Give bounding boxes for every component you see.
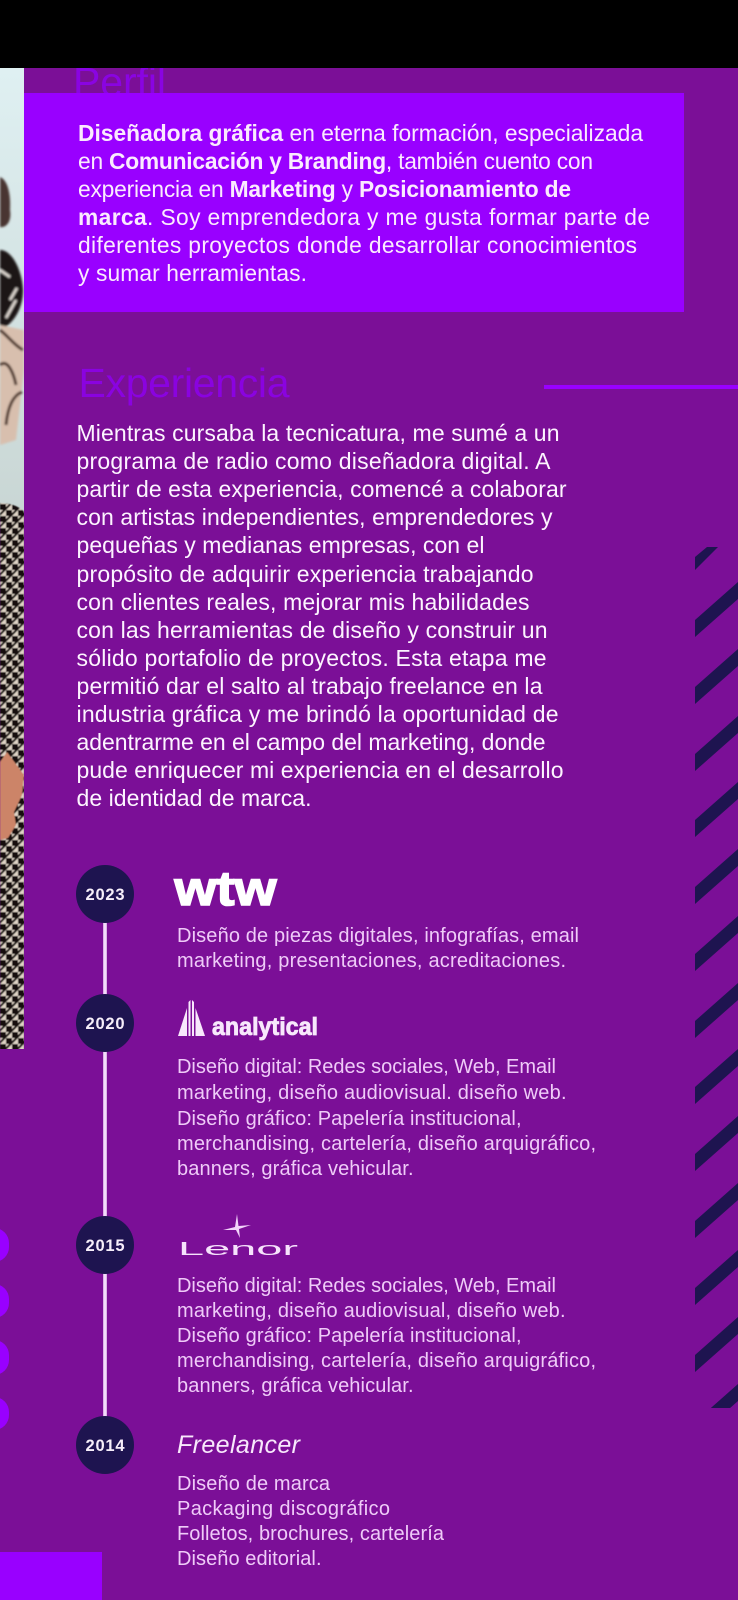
description 2014: Diseño de marca: [177, 1473, 331, 1495]
experience text block: propósito de adquirir experiencia trabajando: [76, 561, 534, 587]
timeline spine: [103, 894, 107, 1445]
logo: analytical: analytical: [212, 1013, 318, 1041]
experience text block: [76, 420, 567, 811]
heading rule: [544, 385, 738, 389]
logo: Lenor: [178, 1214, 298, 1259]
year badge 2020: [76, 994, 134, 1052]
icon: four-point star: [223, 1214, 251, 1238]
year badge 2015: [76, 1216, 134, 1274]
experience text block: de identidad de marca.: [76, 785, 312, 811]
bottom-left purple block: [0, 1552, 102, 1600]
logo: wtw: wtw: [173, 863, 277, 916]
description 2020: Diseño digital: Redes sociales, Web, Email: [177, 1056, 556, 1078]
timeline entry 2020: [76, 994, 596, 1180]
description 2014: Diseño editorial.: [177, 1548, 322, 1570]
logo: Lenor: Lenor: [178, 1239, 298, 1259]
description 2014: Packaging discográfico: [177, 1498, 390, 1520]
experience text block: pequeñas y medianas empresas, con el: [76, 532, 484, 558]
description 2015: Diseño digital: Redes sociales, Web, Email: [177, 1275, 556, 1297]
year badge 2014: 2014: [86, 1437, 125, 1455]
title: Freelancer: Freelancer: [177, 1431, 302, 1459]
timeline entry 2023: [76, 863, 579, 972]
panel background: [24, 93, 684, 312]
experience text block: pude enriquecer mi experiencia en el desarrollo: [76, 757, 564, 783]
year badge 2015: 2015: [86, 1237, 124, 1255]
decorative left purple dots: [0, 1228, 9, 1430]
profile text block: Diseñadora gráfica en eterna formación, especializada: [78, 120, 643, 146]
description 2023: marketing, presentaciones, acreditaciones.: [177, 950, 566, 972]
experience text block: con artistas independientes, emprendedores y: [76, 504, 553, 530]
experience text block: sólido portafolio de proyectos. Esta etapa me: [76, 645, 546, 671]
year badge 2023: [76, 865, 134, 923]
description 2023: [177, 925, 579, 972]
year badge 2020: 2020: [86, 1015, 124, 1033]
description 2020: marketing, diseño audiovisual. diseño web.: [177, 1082, 566, 1104]
decorative diagonal stripes: [695, 547, 738, 1439]
experience text block: permitió dar el salto al trabajo freelance en la: [76, 673, 543, 699]
description 2020: banners, gráfica vehicular.: [177, 1158, 414, 1180]
profile text block: experiencia en Marketing y Posicionamiento de: [78, 176, 571, 202]
description 2014: Folletos, brochures, cartelería: [177, 1523, 445, 1545]
description 2020: Diseño gráfico: Papelería institucional,: [177, 1108, 522, 1130]
description 2023: Diseño de piezas digitales, infografías, email: [177, 925, 579, 947]
experience text block: industria gráfica y me brindó la oportunidad de: [76, 701, 558, 727]
description 2014: [177, 1473, 445, 1570]
profile text block: diferentes proyectos donde desarrollar conocimientos: [78, 232, 637, 258]
year badge 2014: [76, 1416, 134, 1474]
experience text block: programa de radio como diseñadora digital. A: [76, 448, 551, 474]
description 2020: merchandising, cartelería, diseño arquigráfico,: [177, 1133, 596, 1155]
panel: perfil: [24, 93, 684, 312]
description 2015: banners, gráfica vehicular.: [177, 1375, 414, 1397]
heading: Experiencia: Experiencia: [78, 360, 290, 406]
icon: spires: [178, 1000, 205, 1036]
profile text block: y sumar herramientas.: [78, 260, 307, 286]
black top bar: [0, 0, 738, 68]
description 2015: marketing, diseño audiovisual, diseño web.: [177, 1300, 566, 1322]
experience text block: partir de esta experiencia, comencé a colaborar: [76, 476, 567, 502]
profile text block: [78, 120, 650, 286]
description 2015: Diseño gráfico: Papelería institucional,: [177, 1325, 522, 1347]
heading: Perfil: Perfil: [73, 59, 166, 105]
timeline entry 2014: [76, 1416, 445, 1570]
description 2015: merchandising, cartelería, diseño arquigráfico,: [177, 1350, 596, 1372]
profile text block: en Comunicación y Branding, también cuento con: [78, 148, 593, 174]
year badge 2023: 2023: [86, 886, 124, 904]
experience text block: Mientras cursaba la tecnicatura, me sumé a un: [76, 420, 560, 446]
photo strip: woman in houndstooth jacket: [0, 68, 26, 1050]
logo: analytical: [178, 1000, 318, 1041]
description 2020: [177, 1056, 596, 1180]
experience text block: adentrarme en el campo del marketing, donde: [76, 729, 546, 755]
profile text block: marca. Soy emprendedora y me gusta formar parte de: [78, 204, 650, 230]
description 2015: [177, 1275, 596, 1397]
experience text block: con clientes reales, mejorar mis habilidades: [76, 589, 530, 615]
timeline entry 2015: [76, 1214, 596, 1397]
experience text block: con las herramientas de diseño y construir un: [76, 617, 548, 643]
